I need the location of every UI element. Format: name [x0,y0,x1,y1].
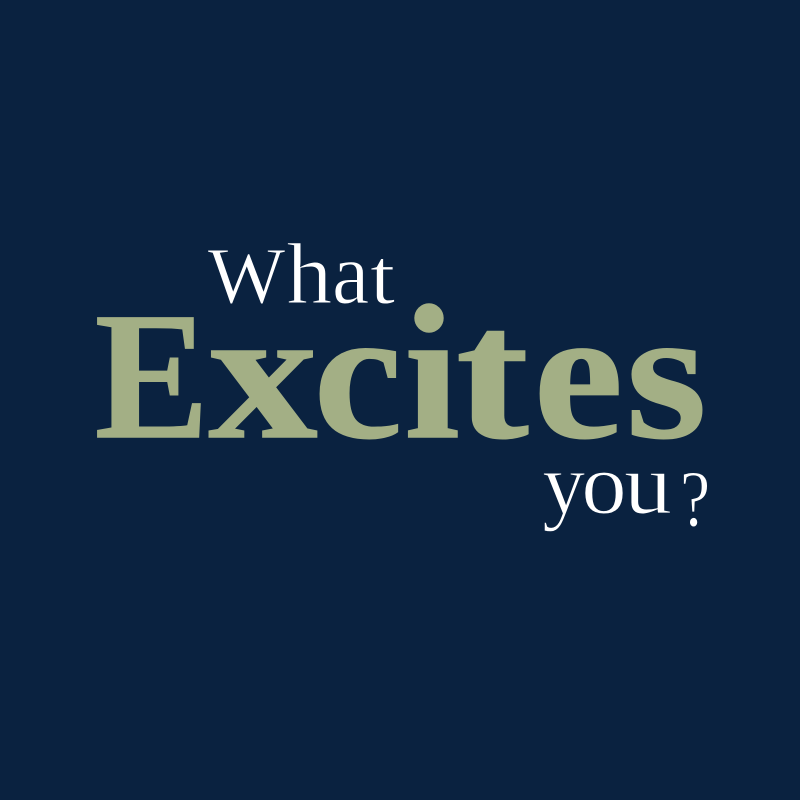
heading word: Excites: x [208,271,318,478]
poster background [97,243,707,532]
heading word: you?: y [542,436,585,532]
heading word: you?: ? [680,456,710,544]
heading word: you?: o [581,437,627,533]
heading word: Excites: t [456,271,529,478]
heading word: What [208,224,395,322]
heading word: Excites [97,303,702,440]
heading word: What: W [208,232,286,321]
heading word: you? [542,436,710,544]
heading word: you?: u [624,436,672,532]
heading word: Excites: i [404,270,460,478]
heading word: What: a [332,224,369,322]
heading word: Excites: s [626,270,707,478]
heading word: Excites: c [314,270,402,478]
heading word: Excites: E [95,276,209,477]
heading word: Excites: e [534,271,623,478]
heading word: What: h [286,227,332,322]
heading word: What: t [370,233,395,321]
